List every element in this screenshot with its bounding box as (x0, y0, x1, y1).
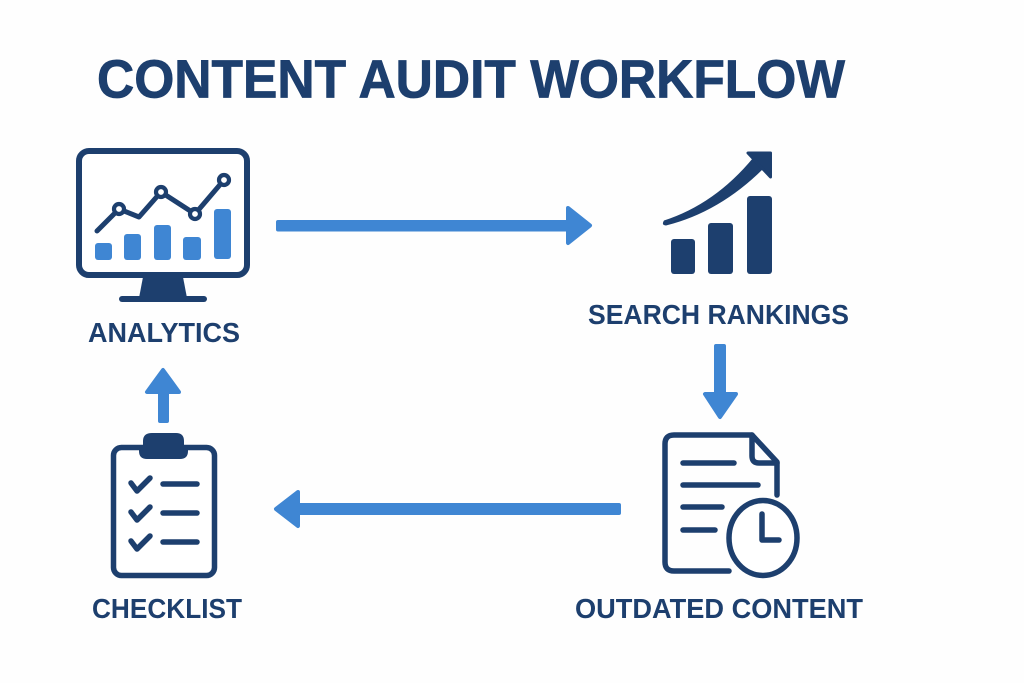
icon: clipboard with checks (114, 433, 214, 576)
arrow: outdated content to checklist (276, 492, 619, 526)
label: analytics: ANALYTICS (88, 317, 240, 348)
arrow: analytics to search rankings (278, 208, 590, 243)
icon: rising bars and arrow (663, 153, 772, 274)
panel: checklist (92, 433, 242, 624)
arrow: checklist to analytics (147, 370, 179, 421)
arrow: search rankings to outdated content (705, 346, 736, 417)
icon: monitor with chart (79, 151, 247, 299)
panel: analytics (79, 151, 247, 348)
panel: search rankings (588, 153, 849, 330)
label: checklist: CHECKLIST (92, 593, 242, 624)
label: outdated content: OUTDATED CONTENT (575, 593, 863, 624)
title: CONTENT AUDIT WORKFLOW (97, 50, 845, 110)
icon: document with clock (665, 435, 797, 576)
label: search rankings: SEARCH RANKINGS (588, 299, 849, 330)
panel: outdated content (575, 435, 863, 624)
